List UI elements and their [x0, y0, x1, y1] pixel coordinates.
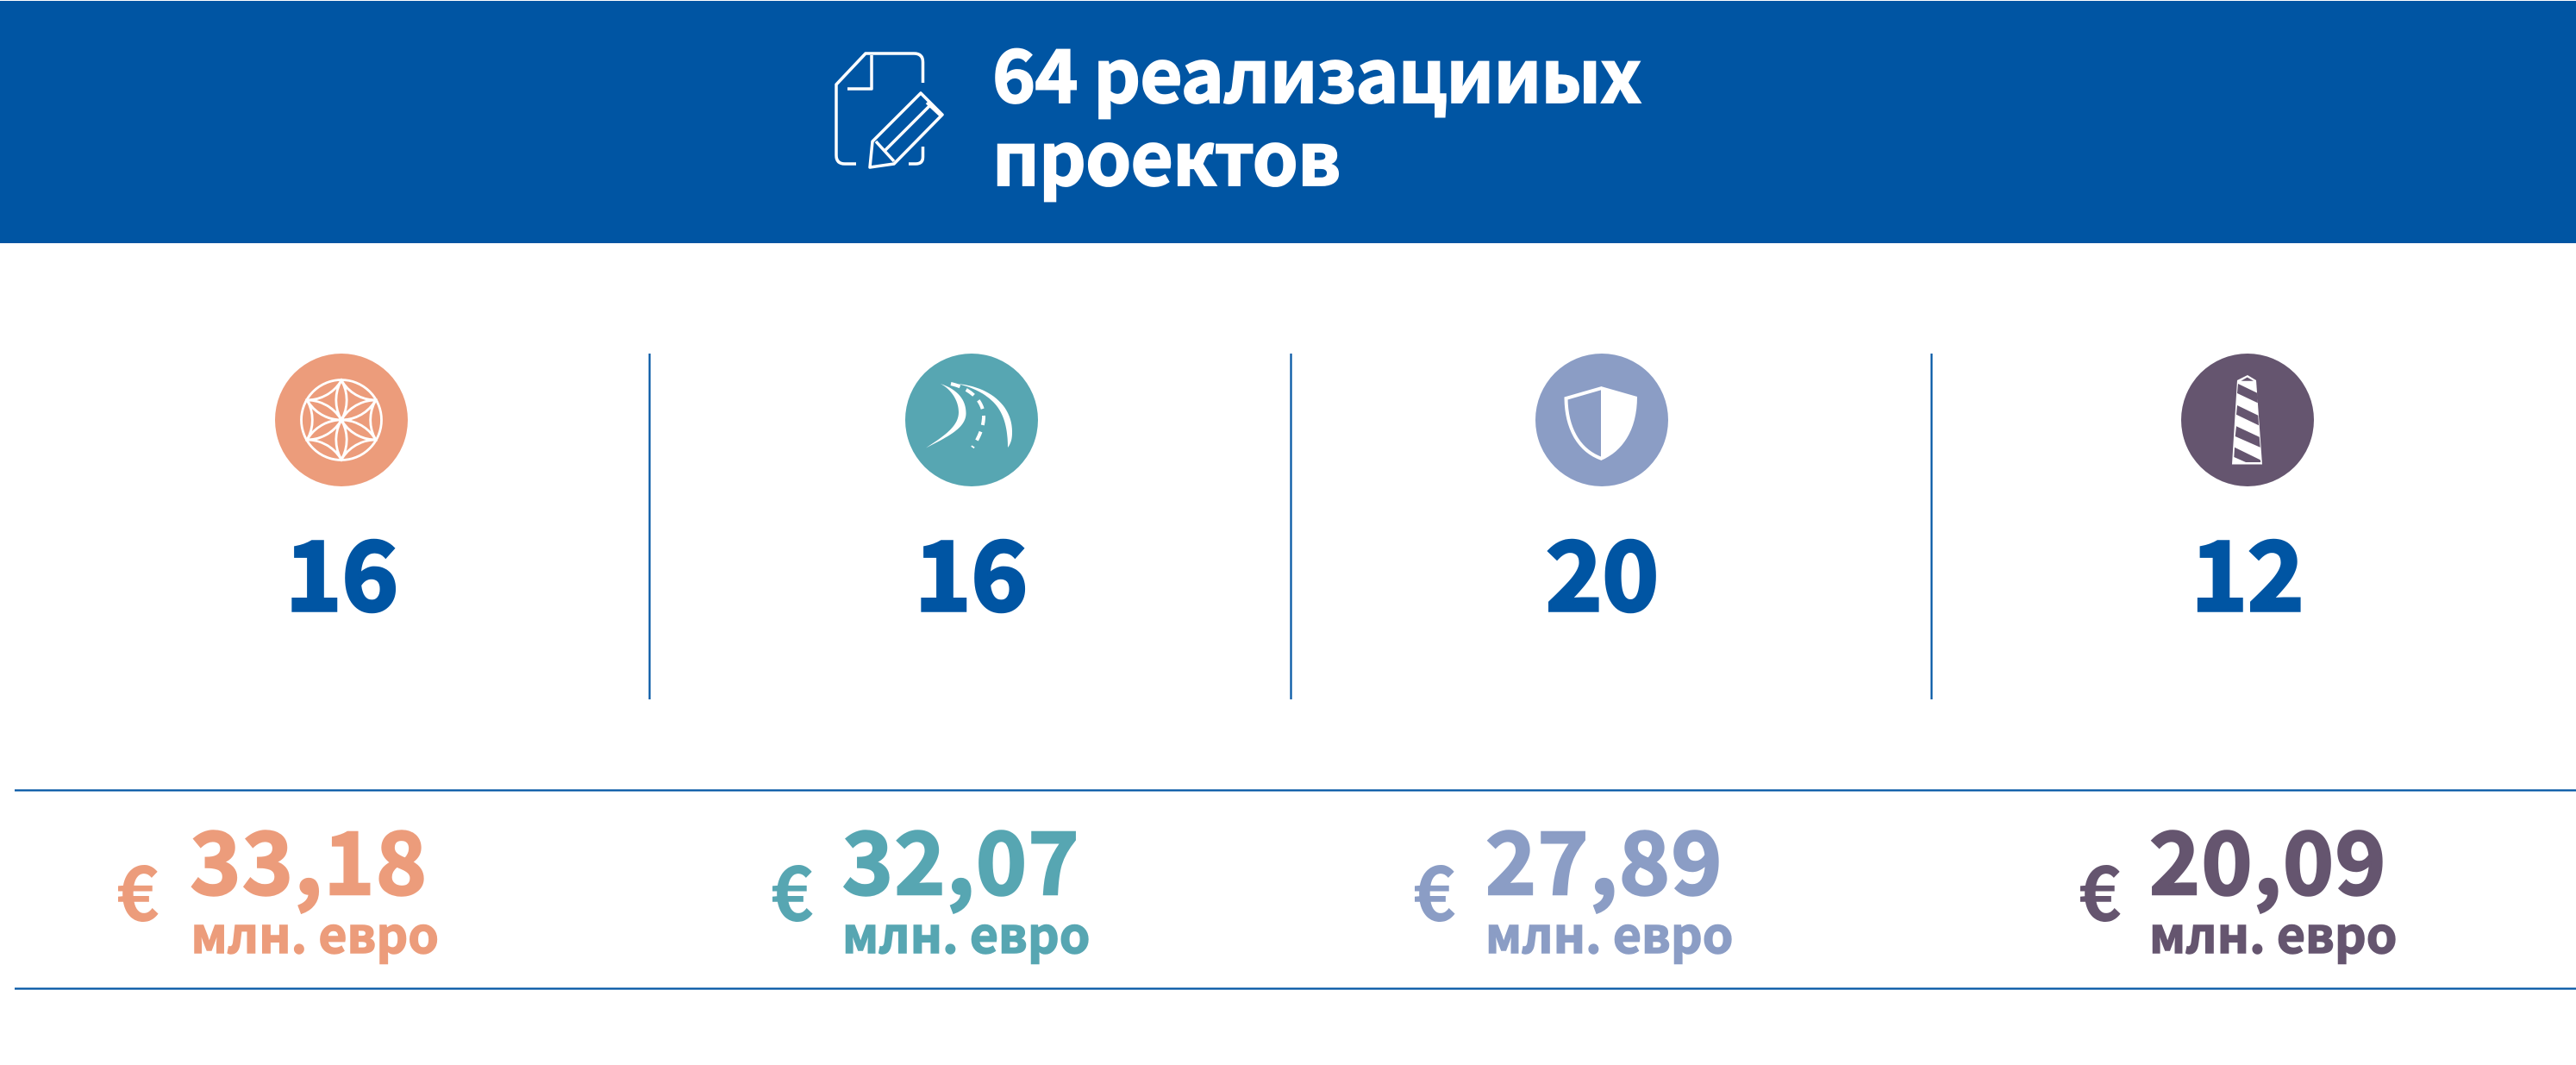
dividers — [15, 354, 2576, 988]
funding: 32,07 — [771, 794, 1091, 968]
icon: document with pencil — [836, 53, 942, 167]
title — [992, 18, 1641, 207]
panel: border count — [2181, 354, 2314, 638]
funding: 27,89 — [1413, 794, 1734, 968]
count: 16: 16 — [285, 499, 398, 638]
funding: 32,07: млн. евро — [842, 897, 1091, 968]
funding: 20,09: 20,09 — [2149, 794, 2387, 919]
funding: 33,18: € — [116, 832, 159, 943]
icon: shield — [1535, 354, 1668, 486]
icon: border post — [2181, 354, 2314, 486]
funding: 20,09: € — [2079, 832, 2121, 943]
panel: culture count — [275, 354, 408, 638]
funding: 33,18: 33,18 — [190, 794, 428, 919]
funding: 27,89: млн. евро — [1485, 897, 1734, 968]
header banner — [0, 1, 2576, 243]
funding: 27,89: 27,89 — [1485, 794, 1723, 919]
title: 64 реализацииых — [992, 18, 1641, 124]
funding: 27,89: € — [1413, 832, 1455, 943]
panel: roads count — [905, 354, 1038, 638]
count: 16: 16 — [915, 499, 1028, 638]
funding: 20,09: млн. евро — [2149, 897, 2398, 968]
funding: 20,09 — [2079, 794, 2398, 968]
icon: road — [905, 354, 1038, 486]
icon: flower rosette — [275, 354, 408, 486]
funding: 32,07: 32,07 — [842, 794, 1080, 919]
funding: 33,18 — [116, 794, 439, 968]
funding: 33,18: млн. евро — [191, 897, 439, 968]
title: проектов — [992, 101, 1341, 207]
panel: security count — [1535, 354, 1668, 638]
count: 20: 20 — [1546, 499, 1659, 638]
count: 12: 12 — [2191, 499, 2304, 638]
funding: 32,07: € — [771, 832, 813, 943]
